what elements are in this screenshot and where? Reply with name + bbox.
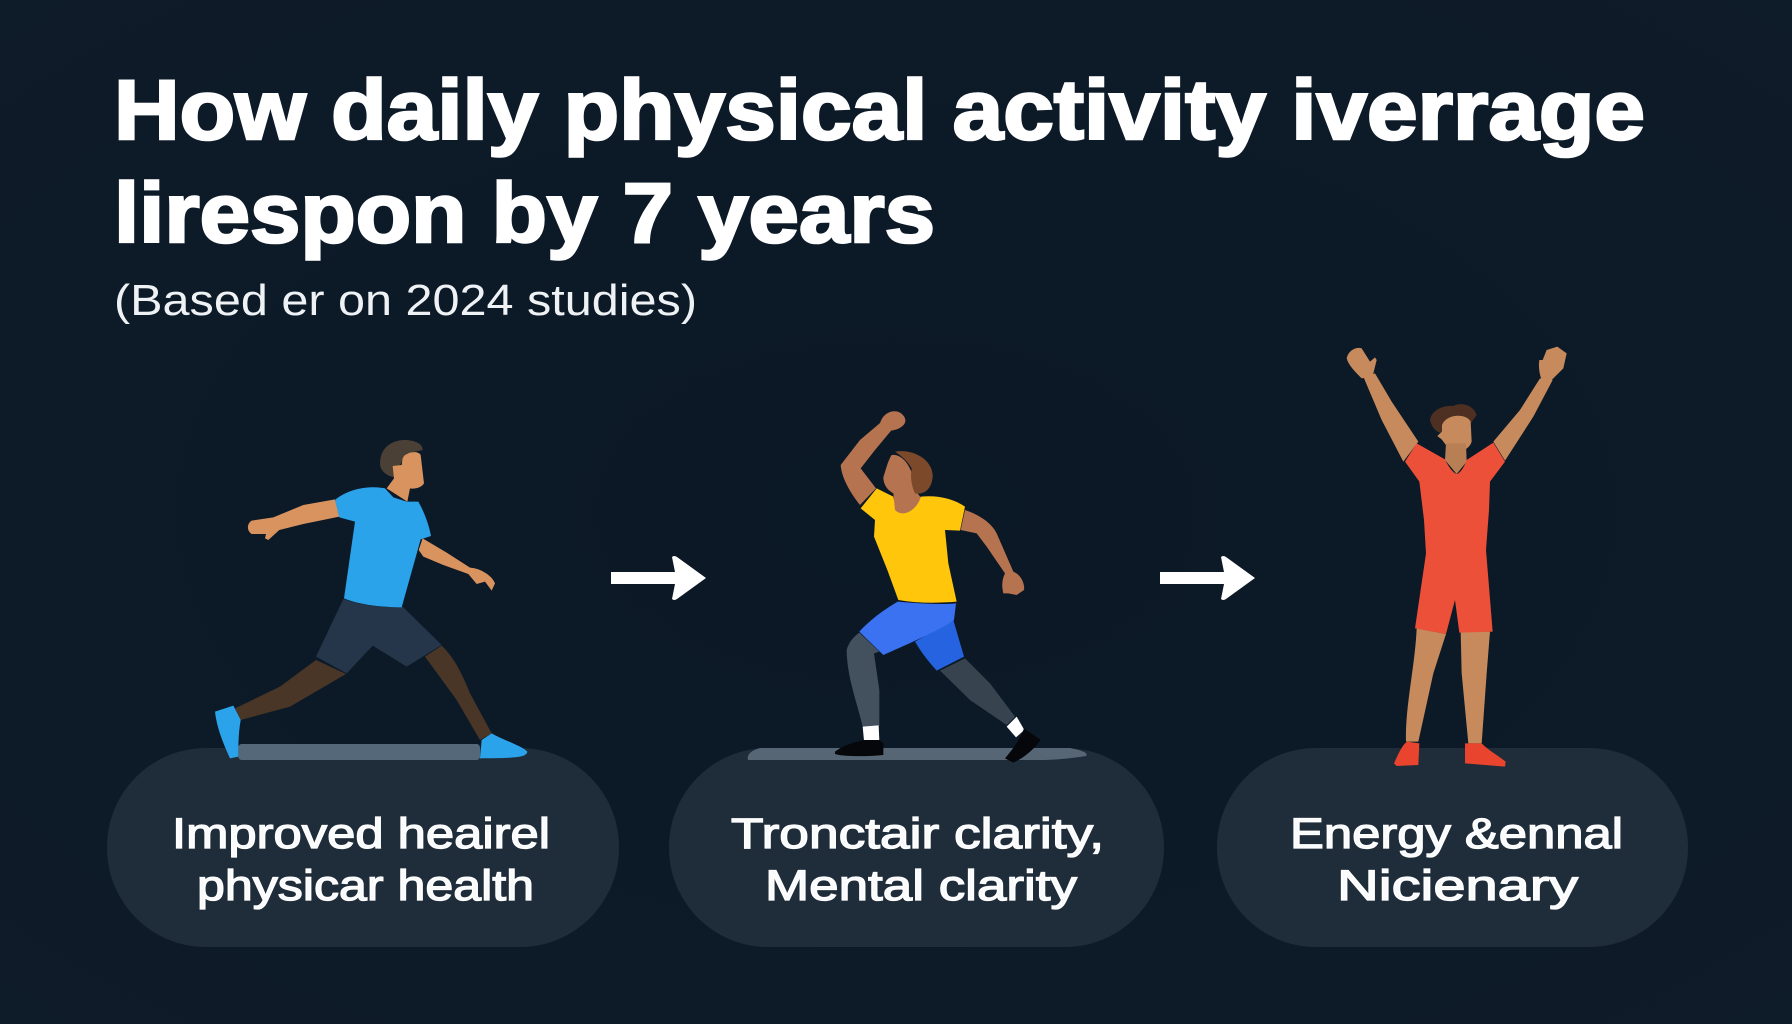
label text 3: Nicienary <box>1337 862 1579 910</box>
ground shadow 2 <box>748 748 1087 760</box>
label text 3 <box>1290 810 1623 910</box>
panel: step 1 physical health <box>107 440 619 947</box>
panel: step 3 energy <box>1217 347 1688 947</box>
subtitle: (Based er on 2024 studies) <box>114 276 697 325</box>
label pill 1 <box>107 748 619 947</box>
label text 1: physicar health <box>197 862 534 910</box>
figure: runner in blue shirt <box>215 440 527 760</box>
label text 1: Improved heairel <box>172 810 550 858</box>
label text 2: Tronctair clarity, <box>731 810 1104 858</box>
label text 1 <box>172 810 550 910</box>
figure: person with raised arms in red <box>1347 347 1567 767</box>
panel: step 2 mental clarity <box>669 411 1164 947</box>
label pill 2 <box>669 748 1164 947</box>
arrow 1 <box>611 556 706 600</box>
title: lirespon by 7 years <box>114 166 935 260</box>
label text 2 <box>731 810 1104 910</box>
label text 2: Mental clarity <box>765 862 1078 910</box>
arrow 2 <box>1160 556 1255 600</box>
label pill 3 <box>1217 748 1688 947</box>
title: How daily physical activity iverrage <box>114 63 1645 157</box>
figure: runner in yellow shirt <box>835 411 1041 763</box>
label text 3: Energy &ennal <box>1290 810 1623 858</box>
title <box>114 63 1645 260</box>
